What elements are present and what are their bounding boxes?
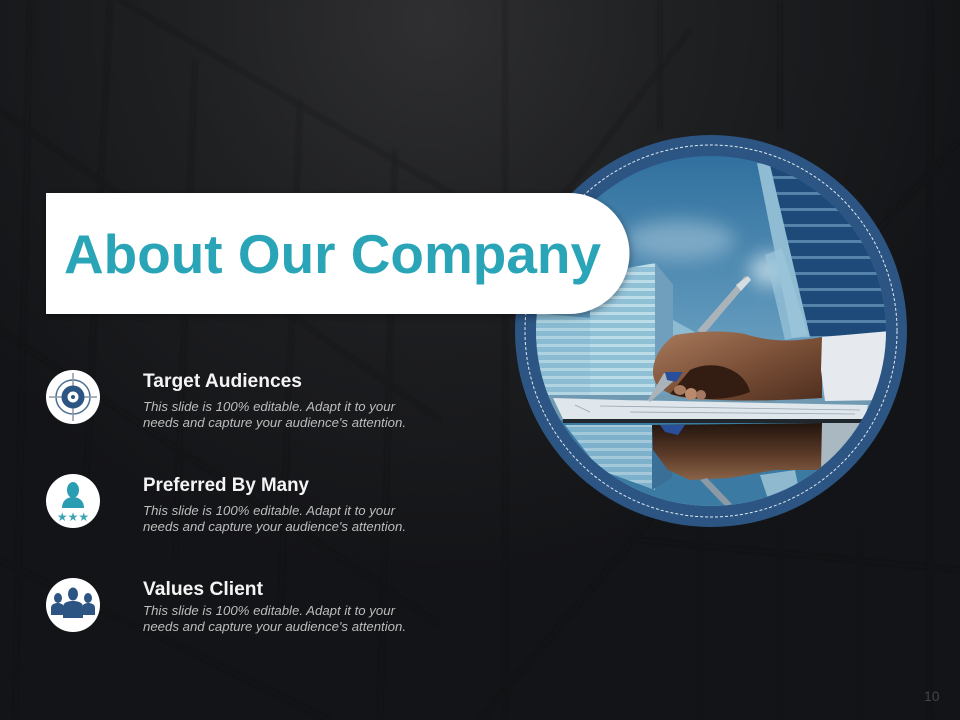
hand [653, 331, 822, 401]
icon: team of three [46, 578, 100, 632]
body text [143, 399, 406, 430]
reflected scene [560, 420, 860, 506]
shirt sleeve [821, 331, 890, 401]
body text [143, 503, 406, 534]
document [553, 398, 868, 419]
body text: This slide is 100% editable. Adapt it to your [143, 503, 396, 518]
item: values client [46, 578, 406, 634]
body text: This slide is 100% editable. Adapt it to your [143, 603, 396, 618]
dashed stitching ring [525, 145, 897, 517]
heading: Values Client [143, 579, 264, 600]
heading: Target Audiences [143, 371, 302, 392]
page number: 10 [924, 688, 940, 704]
icon: person with stars: ★★★ [57, 510, 89, 524]
title banner [46, 193, 630, 314]
body text: needs and capture your audience's attention. [143, 619, 406, 634]
item: target audiences [46, 370, 406, 430]
photo medallion [515, 135, 907, 527]
heading: Preferred By Many [143, 475, 309, 496]
photo: hand signing document [530, 150, 892, 515]
pen lower [648, 373, 674, 402]
pen upper [697, 276, 751, 333]
body text: This slide is 100% editable. Adapt it to your [143, 399, 396, 414]
sleeve reflection [821, 423, 860, 467]
medallion blue ring [515, 135, 907, 527]
hand reflection [652, 423, 822, 480]
body text: needs and capture your audience's attention. [143, 519, 406, 534]
icon: target [46, 370, 100, 424]
icon: person with stars [46, 474, 100, 528]
item: preferred by many [46, 474, 406, 534]
title: About Our Company [64, 223, 601, 285]
body text: needs and capture your audience's attention. [143, 415, 406, 430]
body text [143, 603, 406, 634]
